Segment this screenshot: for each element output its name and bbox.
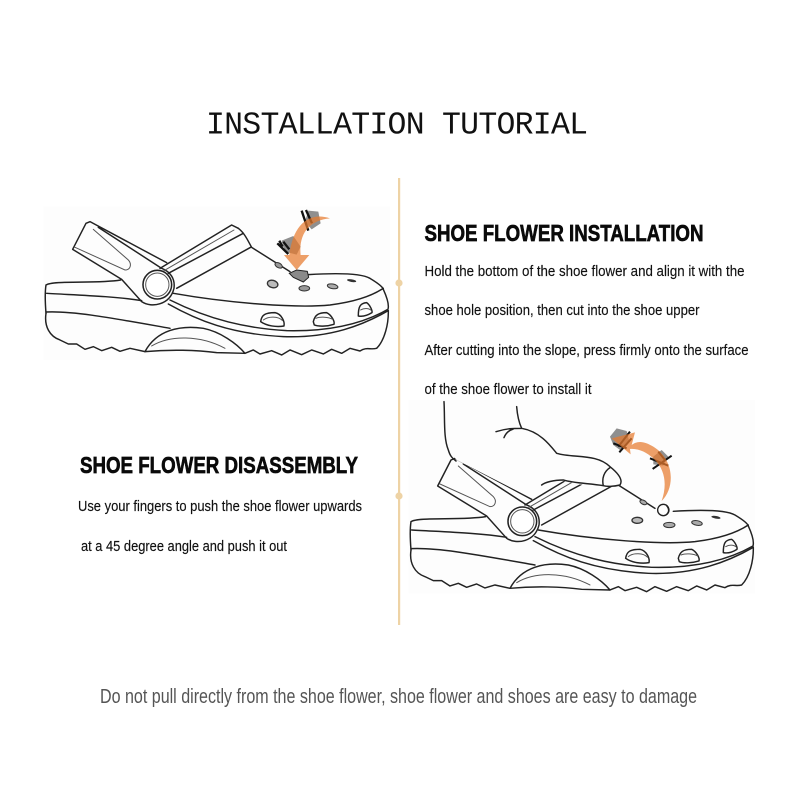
shoe holes (632, 499, 721, 528)
arrow: upward removal (612, 432, 671, 501)
installation step text: Hold the bottom of the shoe flower and align it with the (424, 263, 744, 280)
installation step text: After cutting into the slope, press firmly onto the surface (424, 342, 748, 359)
arrow: downward press (284, 217, 330, 270)
disassembly step text: Use your fingers to push the shoe flower upwards (78, 498, 362, 515)
illustration: installing the shoe flower (43, 207, 390, 360)
timeline divider (395, 178, 403, 625)
disassembly step text: at a 45 degree angle and push it out (81, 538, 288, 555)
icon: shoe flower at start (upper) (302, 210, 321, 231)
icon: shoe flower in motion (lower) (277, 236, 301, 255)
title: INSTALLATION TUTORIAL (206, 108, 588, 144)
installation step text: of the shoe flower to install it (424, 381, 592, 398)
icon: shoe flower in motion (lower) (650, 450, 672, 469)
disassembly step text (78, 498, 362, 555)
heading: shoe flower installation: SHOE FLOWER INSTALLATION (424, 220, 704, 246)
installation step text: shoe hole position, then cut into the shoe upper (424, 302, 700, 319)
icon: shoe flower at end (upper) (610, 428, 632, 452)
installation step text (424, 263, 748, 398)
icon: shoe flower seated on the hole (289, 270, 309, 282)
icon: flower stem knob (658, 504, 669, 516)
hand covering strap (444, 402, 621, 498)
illustration: removing the shoe flower (408, 400, 755, 593)
shoe holes (267, 261, 356, 291)
heading: shoe flower disassembly: SHOE FLOWER DISASSEMBLY (80, 452, 358, 478)
hand outline (444, 402, 621, 486)
